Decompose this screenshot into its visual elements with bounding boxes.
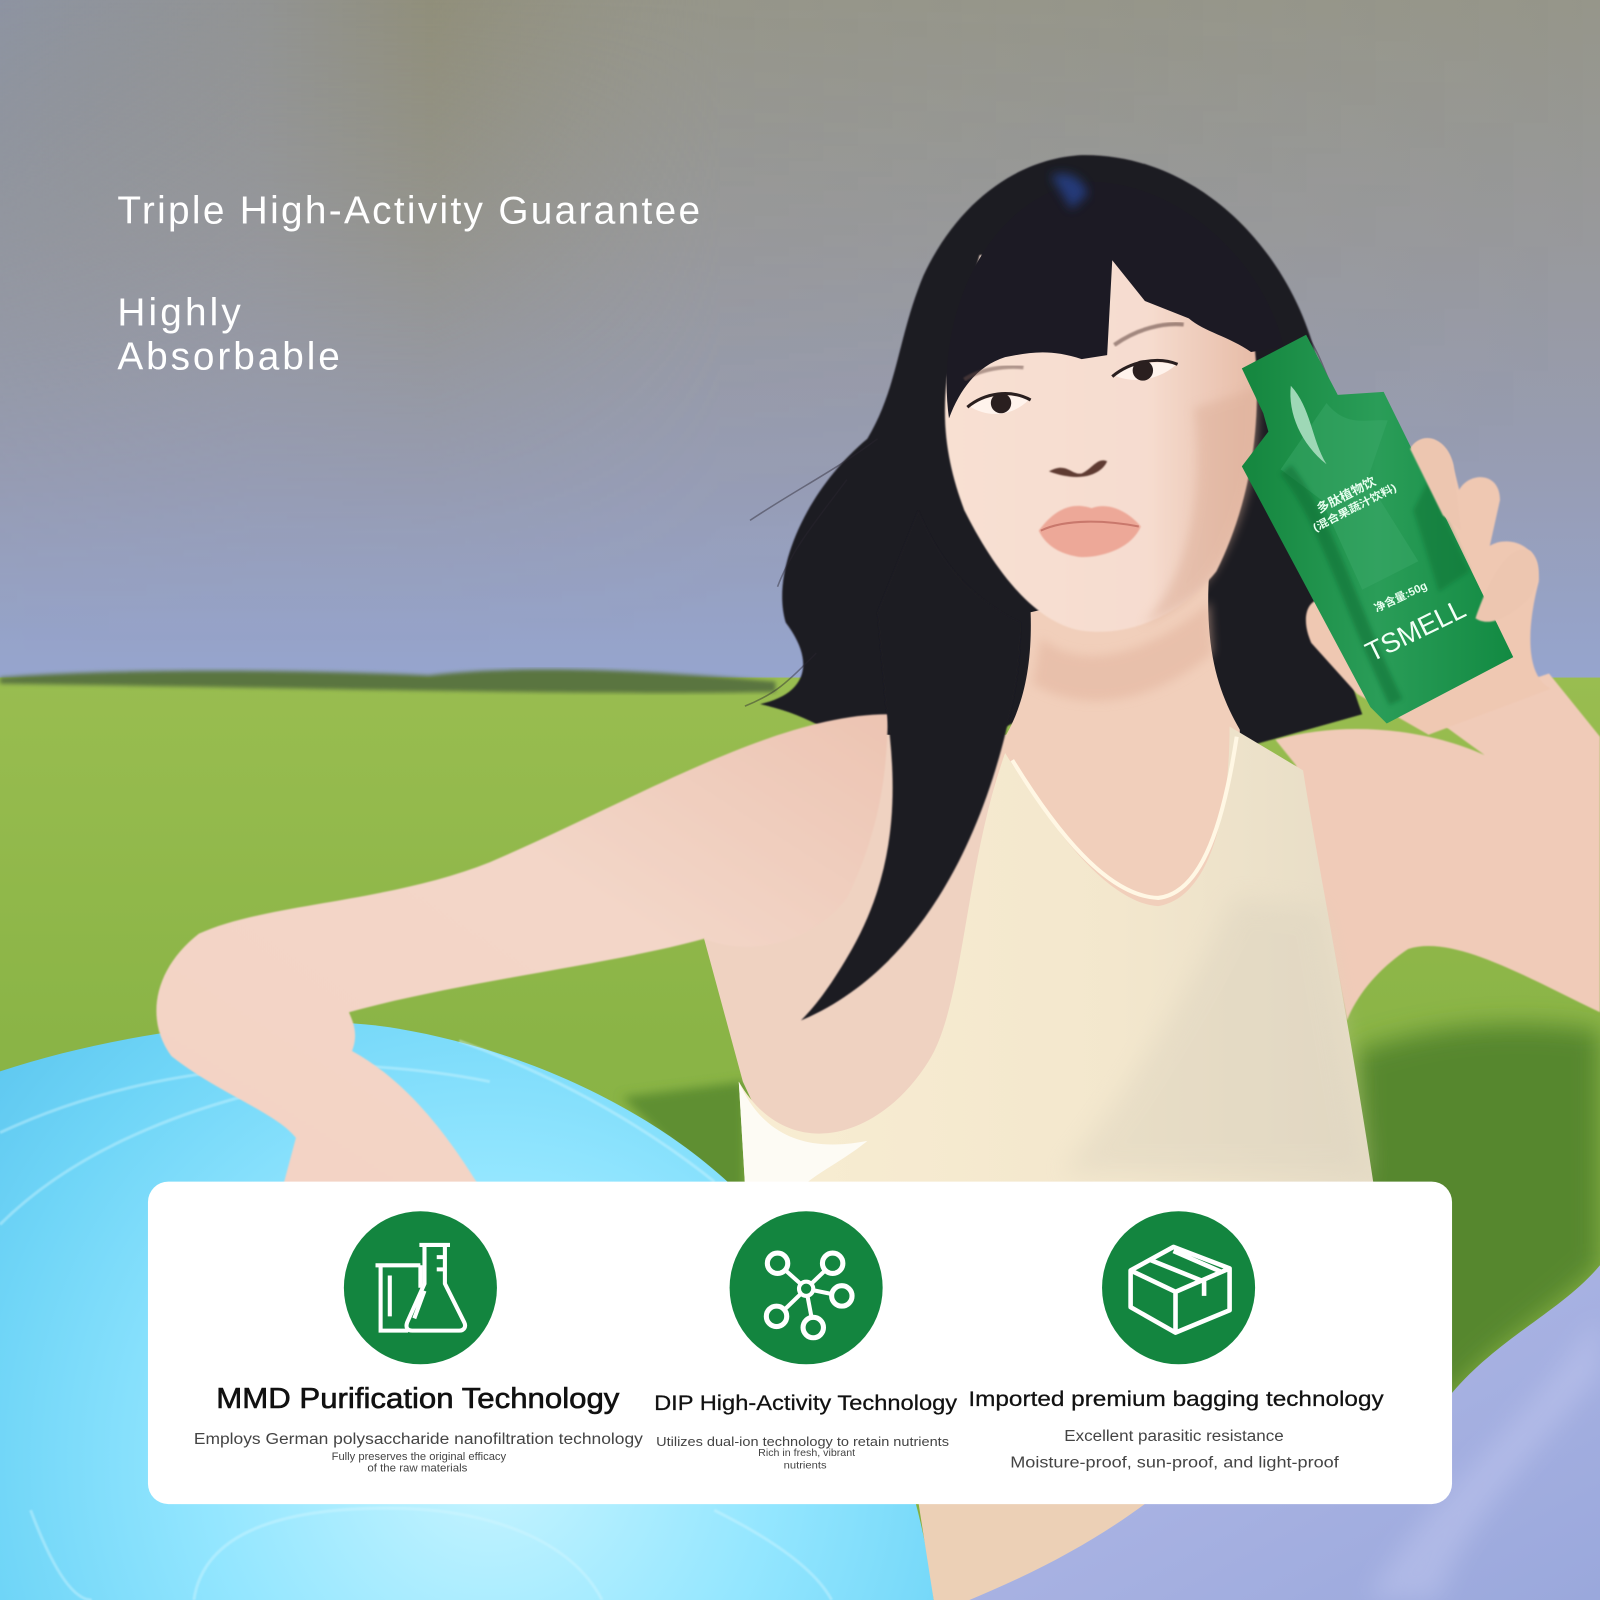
tank top side shadow bbox=[1061, 898, 1367, 1173]
torso skin under left arm bbox=[704, 735, 1010, 1173]
background: lawn bbox=[0, 669, 1600, 1600]
stability ball bbox=[0, 1022, 934, 1600]
right eye bbox=[1112, 360, 1178, 381]
hair fringe bbox=[947, 182, 1284, 418]
pouch text: product type: (混合果蔬汁饮料) bbox=[1311, 481, 1399, 534]
pouch text: brand: TSMELL bbox=[1360, 593, 1470, 668]
description: Utilizes dual-ion technology to retain nutrients bbox=[656, 1434, 949, 1449]
pouch text: net weight: 净含量:50g bbox=[1372, 578, 1429, 615]
neck shadow bbox=[1033, 602, 1212, 701]
description: nutrients bbox=[784, 1460, 827, 1471]
right cheek shadow bbox=[1143, 388, 1258, 624]
feature: MMD purification bbox=[194, 1211, 643, 1474]
subtitle text: Absorbable bbox=[117, 335, 340, 378]
heading: MMD Purification Technology bbox=[216, 1383, 620, 1415]
heading: Imported premium bagging technology bbox=[968, 1387, 1384, 1411]
neck and chest bbox=[990, 571, 1240, 918]
leggings bbox=[969, 1265, 1600, 1600]
heading: DIP High-Activity Technology bbox=[654, 1391, 957, 1415]
description: Moisture-proof, sun-proof, and light-proof bbox=[1010, 1454, 1340, 1471]
tank top white hem bbox=[739, 1082, 867, 1184]
hair wisps bbox=[745, 337, 1337, 706]
title text: Triple High-Activity Guarantee bbox=[117, 189, 700, 232]
panel: technology features bbox=[148, 1182, 1452, 1504]
face bbox=[945, 245, 1257, 632]
description: Rich in fresh, vibrant bbox=[758, 1448, 855, 1459]
hand behind pouch bbox=[1306, 438, 1551, 735]
long hair strand across arm bbox=[801, 510, 1020, 1020]
hair blue sheen bbox=[1051, 174, 1088, 209]
left eye bbox=[967, 393, 1031, 414]
product pouch bbox=[1242, 335, 1513, 723]
description: of the raw materials bbox=[367, 1462, 468, 1474]
icon: package box bbox=[1102, 1211, 1255, 1364]
hair: back mass bbox=[760, 155, 1362, 786]
left arm bbox=[156, 714, 888, 1184]
right eyebrow bbox=[1114, 324, 1184, 345]
pouch text: product name: 多肽植物饮 bbox=[1314, 473, 1379, 516]
description: Excellent parasitic resistance bbox=[1064, 1428, 1284, 1445]
tank top bbox=[739, 727, 1373, 1184]
left eyebrow bbox=[964, 367, 1023, 380]
leggings fold bbox=[1367, 1316, 1600, 1600]
feature: DIP high-activity bbox=[654, 1211, 957, 1471]
icon: lab glassware bbox=[344, 1211, 497, 1364]
lips bbox=[1039, 506, 1141, 557]
icon: molecule network bbox=[730, 1211, 883, 1364]
description: Fully preserves the original efficacy bbox=[332, 1451, 507, 1463]
background: blurred wall bbox=[0, 0, 1600, 684]
fingertips over pouch bbox=[1410, 438, 1538, 622]
neckline trim bbox=[1012, 737, 1237, 898]
right arm and shoulder bbox=[1276, 673, 1600, 1020]
midriff bbox=[913, 1469, 1204, 1600]
subtitle text: Highly bbox=[117, 292, 241, 335]
nose bbox=[1049, 460, 1107, 477]
description: Employs German polysaccharide nanofiltration technology bbox=[194, 1431, 643, 1448]
feature: premium bagging bbox=[968, 1211, 1384, 1471]
